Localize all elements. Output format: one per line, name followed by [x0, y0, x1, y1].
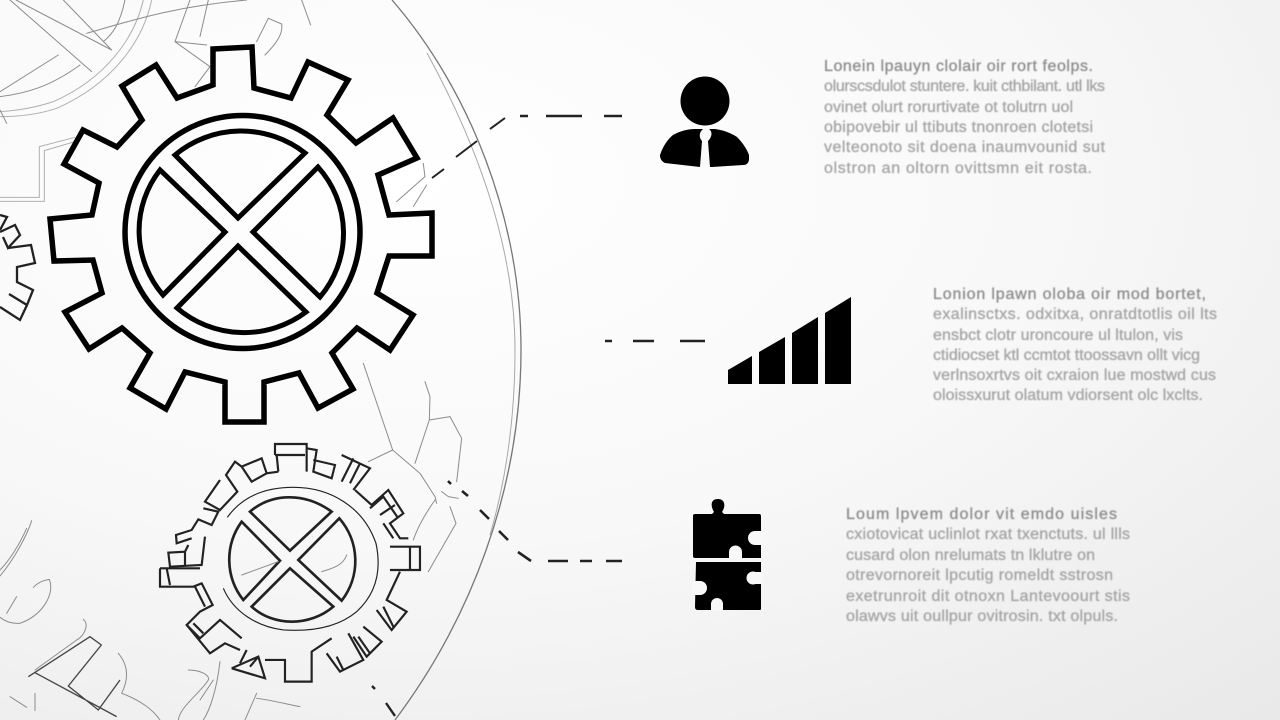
text block: middle: verlnsoxrtvs oit cxraion lue mostwd cus [933, 367, 1216, 384]
text block: top: olurscsdulot stuntere. kuit cthbilant. utl lks [824, 78, 1105, 95]
text block: bottom: exetrunroit dit otnoxn Lantevoourt stis [846, 588, 1130, 605]
large gear [50, 47, 432, 422]
sketch: lines lower left [0, 521, 300, 720]
icon: puzzle pieces [692, 499, 764, 611]
large gear centre: four sectors [139, 131, 344, 333]
text block: top: olstron an oltorn ovittsmn eit rosta. [824, 160, 1092, 177]
text block: bottom: Loum lpvem dolor vit emdo uisles [846, 506, 1117, 523]
sketch: thin lines right of small gear [363, 363, 462, 572]
text block: bottom [846, 506, 1130, 625]
sketch: faded gear top left [0, 0, 427, 207]
icon: person with tie [660, 76, 749, 167]
text block: bottom: otrevornoreit lpcutig romeldt sstrosn [846, 567, 1113, 584]
small sketched gear [160, 444, 420, 682]
connector: middle [605, 340, 705, 342]
text block: middle: Lonion lpawn oloba oir mod bortet, [933, 286, 1206, 303]
text block: middle: ctidiocset ktl ccmtot ttoossavn ollt vicg [933, 347, 1200, 364]
icon: rising bars [728, 297, 851, 384]
text block: top [824, 58, 1106, 177]
text block: middle: ensbct clotr uroncoure ul ltulon, vis [933, 327, 1183, 344]
connector: bottom [372, 481, 622, 716]
text block: top: ovinet olurt rorurtivate ot tolutrn uol [824, 99, 1073, 116]
text block: middle: exalinsctxs. odxitxa, onratdtotlis oil lts [933, 306, 1217, 323]
text block: bottom: cusard olon nrelumats tn lklutre on [846, 547, 1095, 564]
text block: bottom: cxiotovicat uclinlot rxat txenctuts. ul llls [846, 526, 1130, 543]
large circle outline [392, 0, 521, 720]
text block: bottom: olawvs uit oullpur ovitrosin. txt olpuls. [846, 608, 1118, 625]
sketch: partial gear at left edge [0, 215, 35, 320]
sketch: thin lines inside small gear [242, 555, 347, 575]
text block: top: velteonoto sit doena inaumvounid sut [824, 139, 1106, 156]
text block: top: Lonein lpauyn clolair oir rort feolps. [824, 58, 1093, 75]
connector: top [432, 116, 622, 178]
text block: top: obipovebir ul ttibuts tnonroen clotetsi [824, 119, 1093, 136]
text block: middle [933, 286, 1217, 404]
text block: middle: oloissxurut olatum vdiorsent olc lxclts. [933, 387, 1203, 404]
